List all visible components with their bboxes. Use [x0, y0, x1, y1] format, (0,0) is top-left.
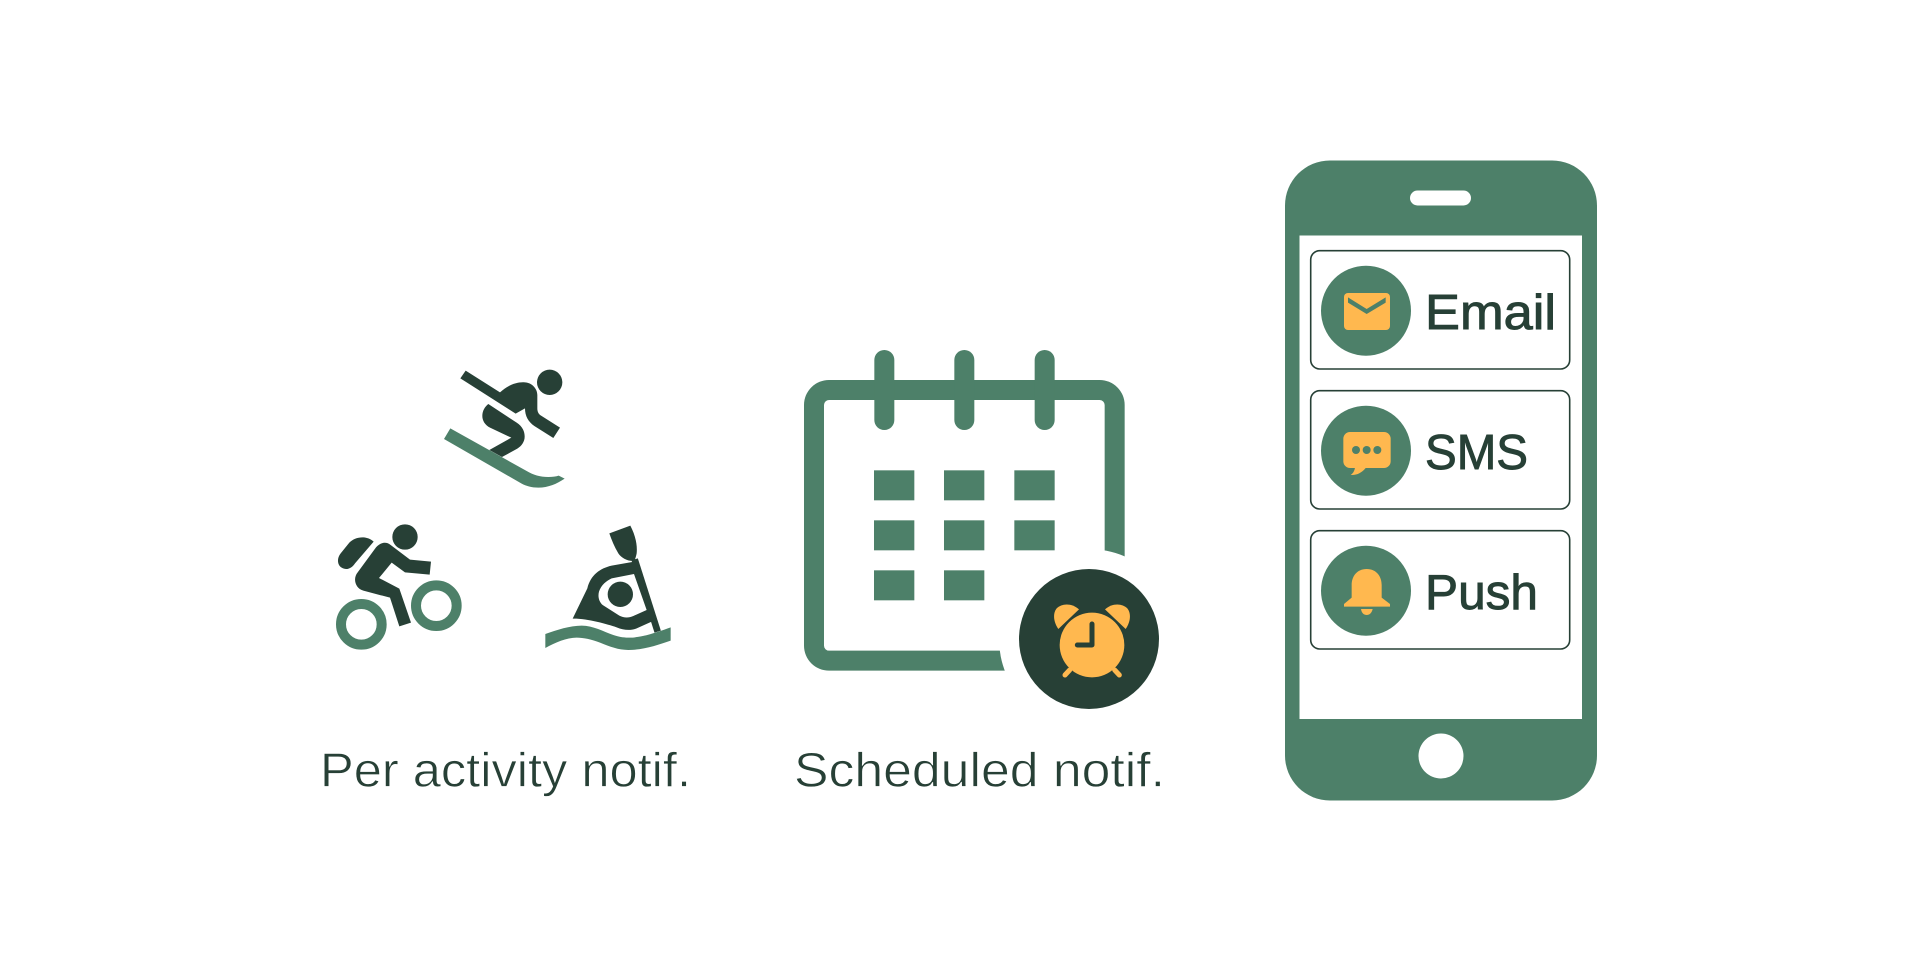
icon: bell: [1344, 569, 1390, 615]
icons: activity group: [338, 370, 671, 650]
icon: kayaker: [545, 526, 671, 650]
calendar rings: [884, 360, 1045, 420]
panel: scheduled notifications: [794, 360, 1179, 798]
clock badge cut-out: [999, 549, 1179, 729]
icon: alarm clock: [1054, 604, 1130, 677]
phone speaker: [1410, 190, 1471, 206]
card: sms: [1311, 391, 1570, 509]
phone body: [1285, 160, 1597, 800]
card: sms: SMS: [1425, 426, 1528, 480]
phone home button: [1418, 734, 1464, 778]
icon: envelope: [1344, 293, 1390, 330]
calendar frame: [804, 380, 1125, 671]
icon: skier: [444, 370, 565, 488]
card: email: Email: [1425, 286, 1556, 340]
clock badge: [1019, 569, 1159, 709]
card: push: [1311, 531, 1570, 649]
panel: per activity notifications: [320, 370, 691, 798]
icon: calendar with alarm clock: [804, 360, 1179, 729]
calendar day squares: [874, 470, 1055, 600]
icon: speech bubble: [1343, 432, 1391, 475]
label: per activity: Per activity notif.: [320, 744, 691, 798]
icon: mountain biker: [338, 524, 457, 645]
label: scheduled: Scheduled notif.: [794, 744, 1165, 798]
card: email: [1311, 251, 1570, 369]
card: push: Push: [1425, 566, 1538, 620]
panel: phone: [1285, 160, 1597, 800]
phone screen: [1300, 236, 1582, 719]
